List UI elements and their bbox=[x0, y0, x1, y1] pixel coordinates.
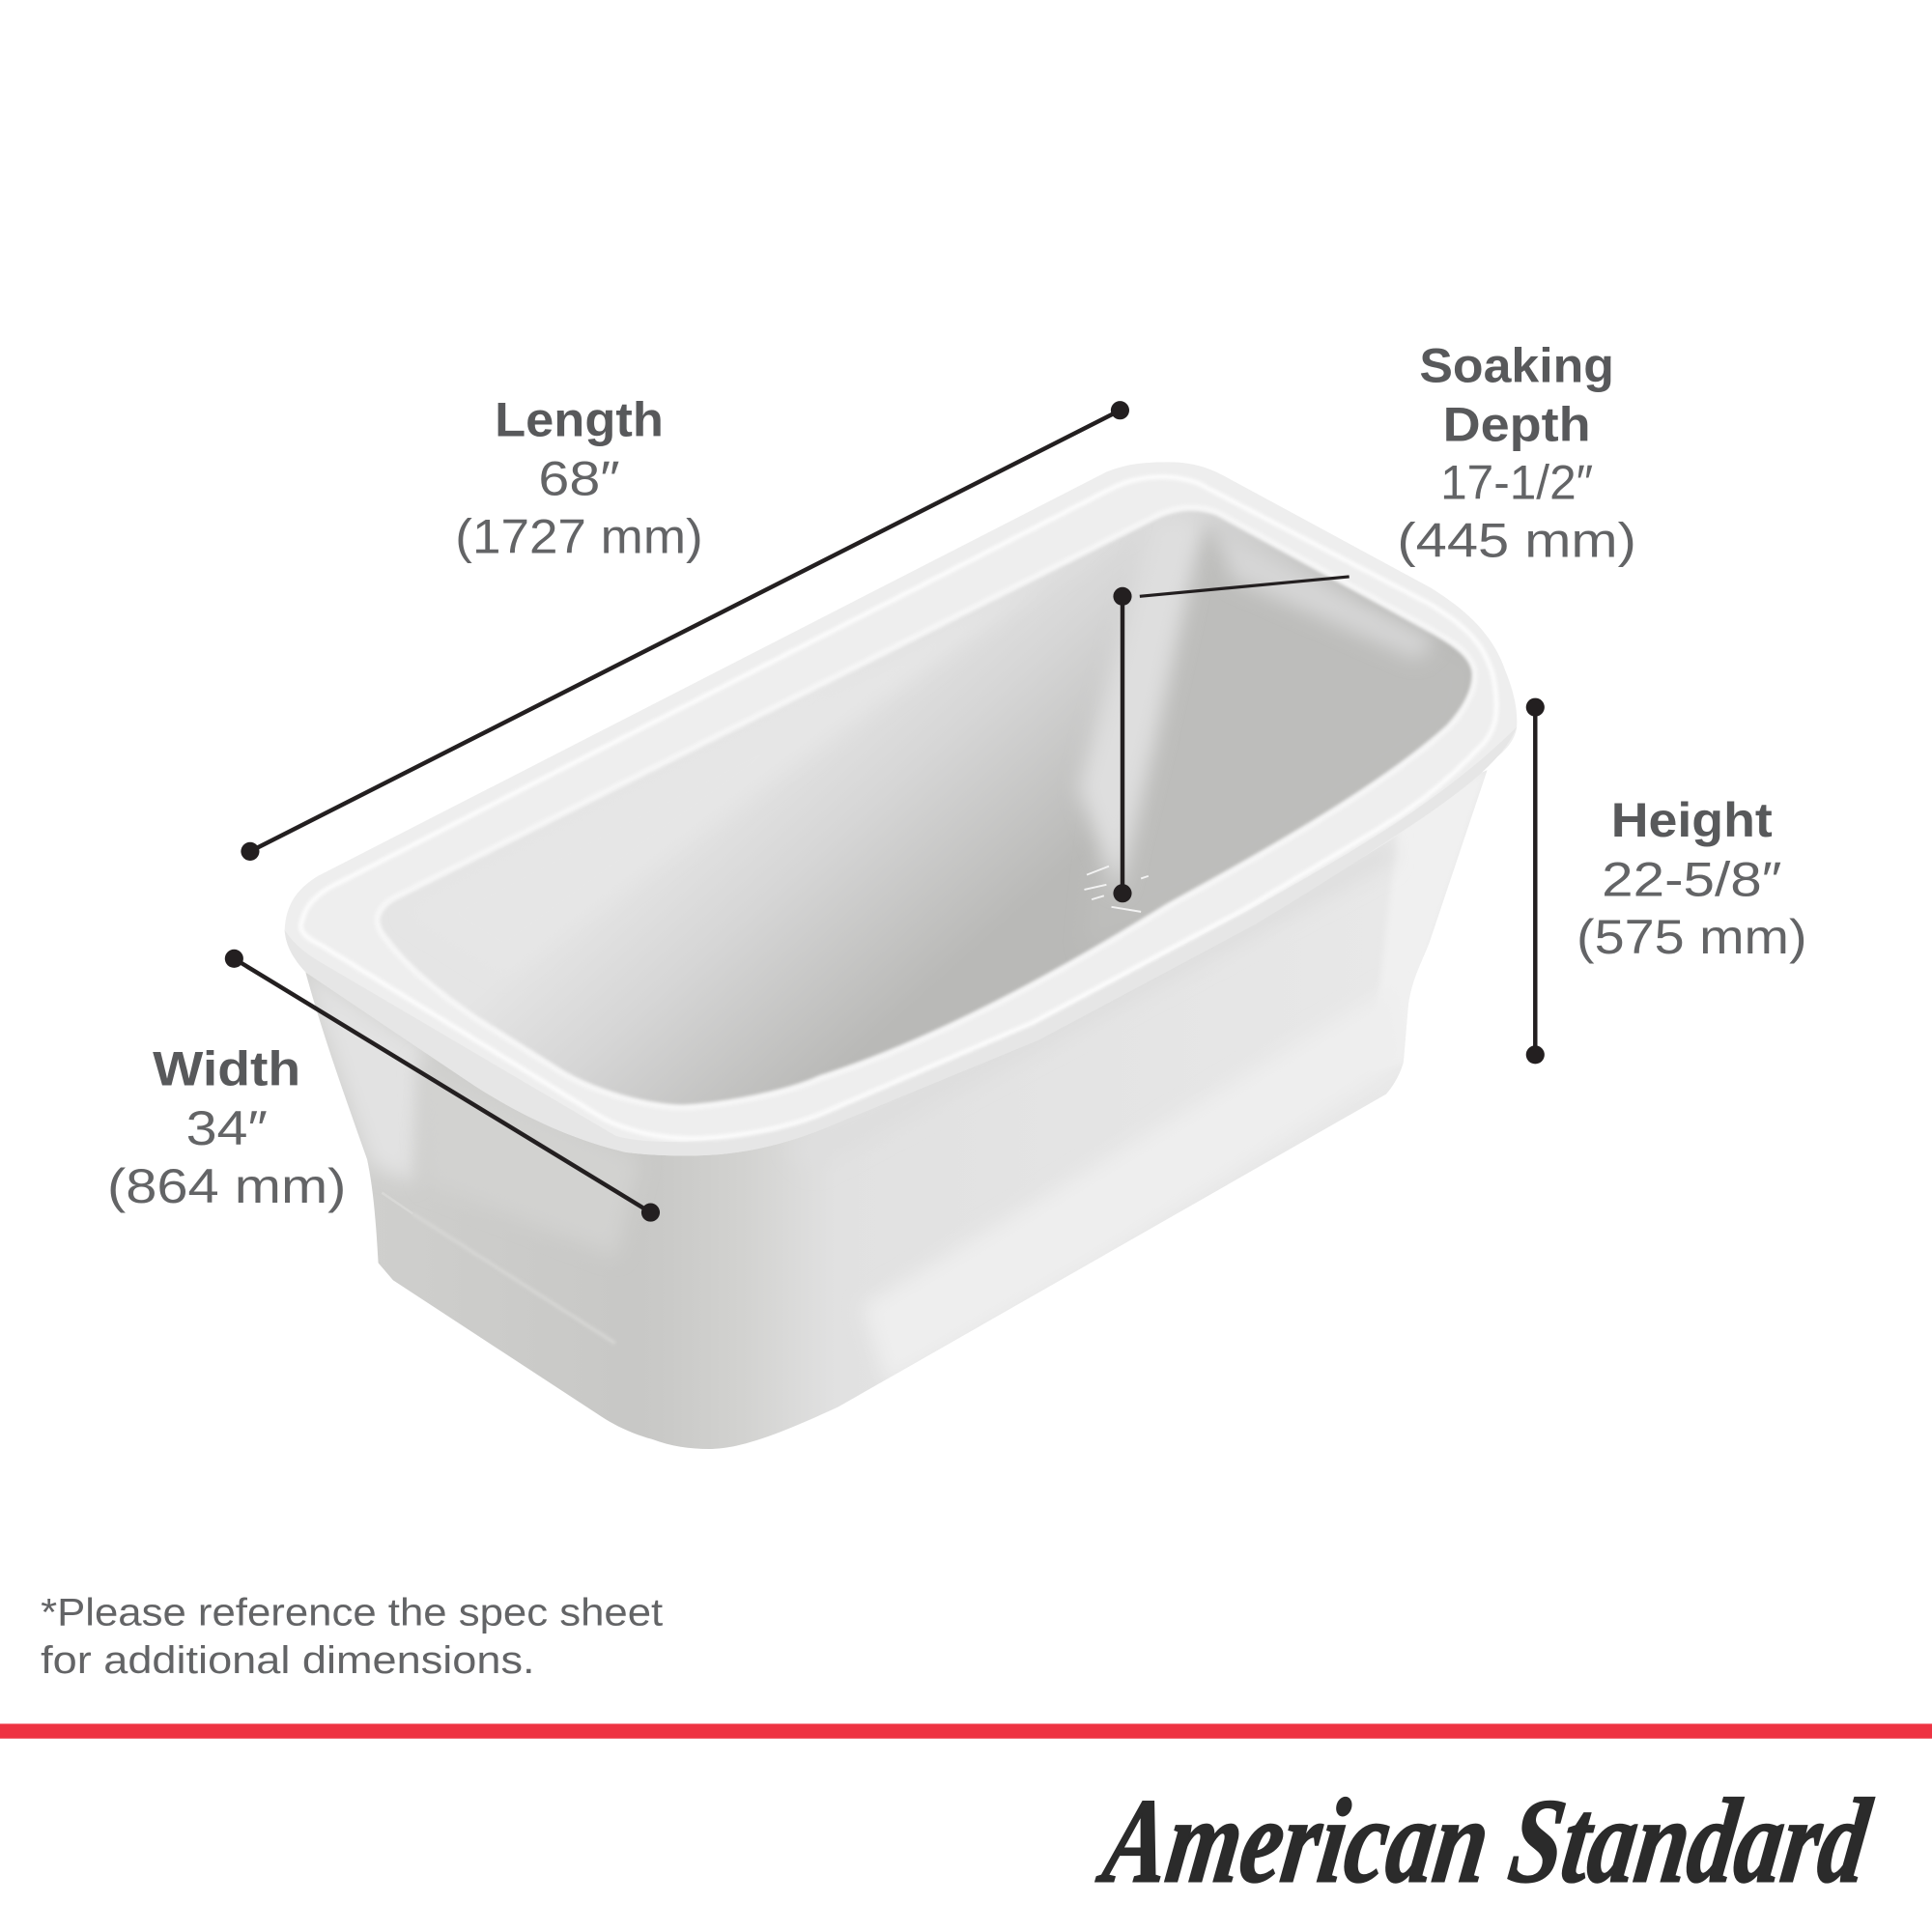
label: soaking depth: Soaking bbox=[1419, 338, 1614, 392]
label: width bbox=[107, 1042, 346, 1213]
label: soaking depth bbox=[1397, 338, 1636, 568]
tub basin interior bbox=[377, 508, 1479, 1108]
tub rim bbox=[285, 462, 1517, 1155]
basin back wall shading bbox=[1180, 531, 1259, 668]
label: soaking depth: 17-1/2″ bbox=[1440, 456, 1593, 510]
dimension line: soaking depth bbox=[1113, 577, 1350, 902]
red divider bar bbox=[0, 1723, 1932, 1739]
footnote: for additional dimensions. bbox=[41, 1639, 535, 1682]
dimension line: height bbox=[1526, 698, 1545, 1064]
drain highlights bbox=[1084, 867, 1149, 912]
label: height: Height bbox=[1611, 793, 1773, 847]
label: height: 22-5/8″ bbox=[1602, 852, 1781, 906]
label: length bbox=[455, 393, 703, 564]
label: length: 68″ bbox=[538, 452, 620, 506]
label: soaking depth: Depth bbox=[1443, 398, 1591, 452]
dimension line: width bbox=[225, 950, 660, 1222]
label: length: (1727 mm) bbox=[455, 510, 703, 564]
label: soaking depth: (445 mm) bbox=[1397, 514, 1636, 568]
label: length: Length bbox=[495, 393, 664, 447]
dimension line: length bbox=[241, 401, 1129, 861]
label: width: Width bbox=[153, 1042, 300, 1096]
label: width: 34″ bbox=[186, 1101, 268, 1155]
label: height: (575 mm) bbox=[1577, 910, 1807, 964]
bathtub illustration bbox=[285, 462, 1517, 1449]
label: width: (864 mm) bbox=[107, 1159, 346, 1213]
tub outer body bbox=[301, 770, 1488, 1449]
footnote: *Please reference the spec sheet bbox=[41, 1591, 663, 1634]
label: height bbox=[1577, 793, 1807, 964]
footnote bbox=[41, 1591, 663, 1682]
infographic canvas bbox=[0, 347, 1932, 1884]
